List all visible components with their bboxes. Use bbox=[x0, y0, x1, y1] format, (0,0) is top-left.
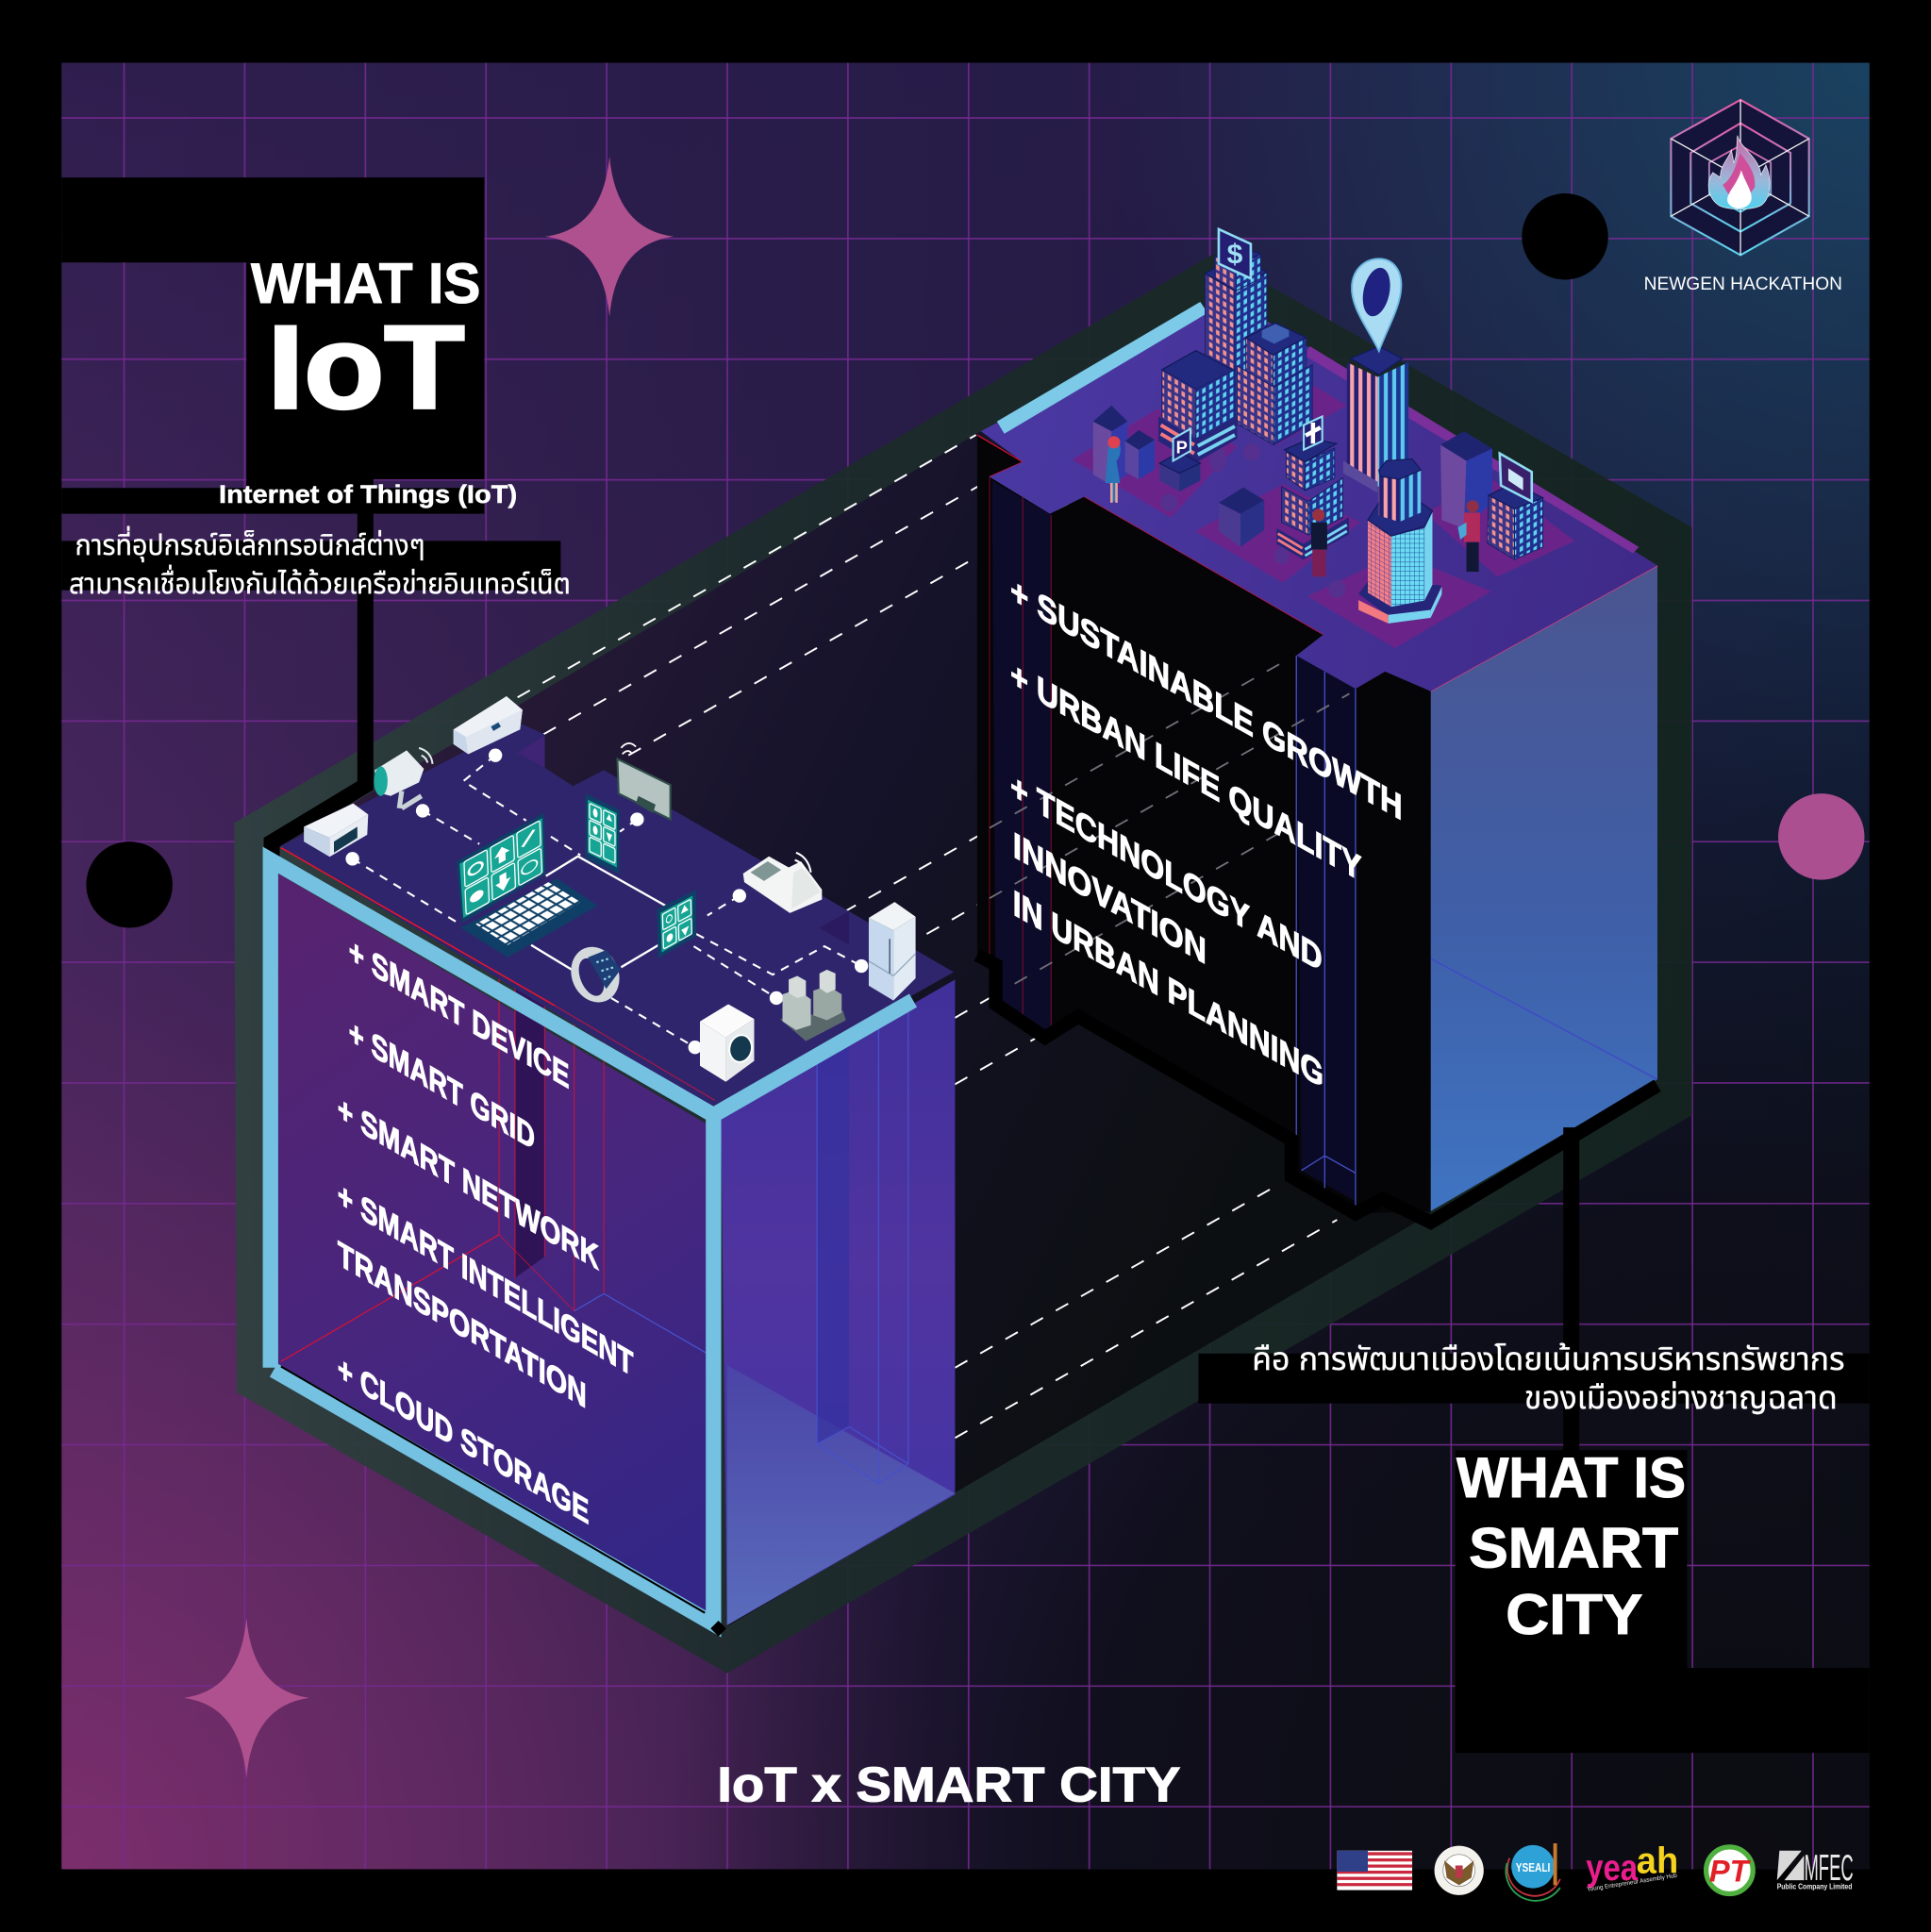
logo: MFEC bbox=[1777, 1848, 1854, 1890]
city box list text: + SUSTAINABLE GROWTH bbox=[1010, 569, 1403, 828]
bottom corner mark bbox=[710, 1621, 726, 1637]
IoT box list text bbox=[338, 930, 633, 1532]
logo: Newgen Hackathon: NEWGEN HACKATHON bbox=[1644, 274, 1842, 294]
inner black line bbox=[281, 1366, 705, 1613]
city box list text bbox=[1010, 569, 1403, 1096]
icon: tablet bbox=[657, 890, 696, 958]
IoT rooftop bbox=[280, 724, 954, 1108]
text block: IoT definition in Thai: การที่อุปกรณ์อิเล็กทรอนิกส์ต่างๆ bbox=[75, 525, 425, 562]
building: parking with sign: P bbox=[1176, 438, 1188, 458]
city box black base outline bbox=[977, 955, 1657, 1223]
building: right mid tower bbox=[1238, 323, 1312, 445]
icon: smartwatch bbox=[563, 940, 627, 1009]
logo: YSEALI: YSEALI bbox=[1516, 1860, 1550, 1874]
city box black facade bbox=[977, 435, 1431, 1214]
text block: IoT definition in Thai: สามารถเชื่อมโยงกันได้ด้วยเครือข่ายอินเทอร์เน็ต bbox=[69, 564, 571, 600]
building: parking with sign bbox=[1159, 429, 1200, 491]
IoT heading block bbox=[61, 177, 560, 857]
building: stacked right block with sign bbox=[1488, 454, 1543, 559]
logo: US flag bbox=[1337, 1851, 1412, 1890]
faint dashes behind facade bbox=[990, 663, 1349, 998]
heading: what is smart city: SMART bbox=[1469, 1516, 1679, 1579]
heading: what is IoT bbox=[251, 252, 480, 433]
IoT box list text: + SMART DEVICE bbox=[349, 930, 570, 1097]
person: man in red bbox=[1457, 500, 1480, 572]
heading: what is smart city: WHAT IS bbox=[1457, 1446, 1686, 1509]
decorative black circle top right bbox=[1522, 193, 1608, 279]
heading: what is smart city bbox=[1457, 1446, 1686, 1646]
logo: US embassy seal bbox=[1435, 1846, 1484, 1895]
icon: four point star bottom bbox=[184, 1618, 309, 1778]
Thai description band bbox=[61, 541, 560, 591]
partner logos bbox=[1337, 1840, 1854, 1901]
icon: dollar sign board bbox=[1219, 229, 1251, 278]
text block: IoT definition in Thai bbox=[69, 525, 571, 600]
logo: YEAH bbox=[1586, 1840, 1678, 1893]
logo: YEAH: Young Entrepreneur Assembly Hub bbox=[1587, 1873, 1678, 1893]
magenta back rim bbox=[1304, 346, 1639, 553]
icon: refrigerator bbox=[869, 902, 916, 1001]
facade translucent columns bbox=[977, 435, 1356, 1205]
heading: what is IoT: WHAT IS bbox=[251, 252, 480, 315]
city box list text: IN URBAN PLANNING bbox=[1013, 882, 1323, 1096]
icon: washing machine bbox=[700, 1004, 755, 1082]
side inner columns bbox=[817, 1004, 908, 1484]
text block: smart city definition in Thai: ของเมืองอย่างชาญฉลาด bbox=[1524, 1380, 1838, 1416]
icon: four point star top bbox=[545, 157, 674, 317]
rooftop magenta city blocks bbox=[1072, 383, 1574, 648]
logo: YEAH: yea bbox=[1586, 1848, 1639, 1889]
building: middle tower with hospital sign bbox=[1276, 416, 1349, 559]
IoT box list text: + SMART NETWORK bbox=[338, 1089, 599, 1278]
logo: PT: PT bbox=[1709, 1853, 1752, 1888]
rooftop notch shadow right bbox=[819, 911, 849, 945]
network nodes bbox=[345, 748, 868, 1054]
title: IoT x Smart City: IoT x SMART CITY bbox=[717, 1758, 1180, 1813]
panel: smart city box bbox=[977, 229, 1657, 1223]
logo: MFEC: Public Company Limited bbox=[1777, 1882, 1852, 1890]
icon: laptop bbox=[457, 813, 598, 958]
light blue rim bbox=[997, 302, 1207, 434]
building: dark right slab bbox=[1440, 431, 1492, 528]
rooftop front red edge bbox=[281, 848, 555, 1006]
smart city heading blocks bbox=[1199, 1127, 1870, 1753]
IoT box list text: + SMART INTELLIGENT bbox=[338, 1174, 633, 1385]
city box list text: + TECHNOLOGY AND bbox=[1010, 765, 1323, 979]
text block: smart city definition in Thai: คือ การพัฒนาเมืองโดยเน้นการบริหารทรัพยากร bbox=[1252, 1341, 1845, 1377]
front floor lines and inner column bbox=[281, 974, 707, 1361]
icon: pickup truck bbox=[743, 853, 822, 913]
icon: air conditioner bbox=[454, 696, 523, 754]
icon: microwave bbox=[304, 804, 368, 857]
icon: dollar sign board: $ bbox=[1227, 240, 1243, 271]
decorative black circle left bbox=[86, 841, 173, 928]
heading: what is smart city: CITY bbox=[1506, 1583, 1642, 1646]
building: striped pin tower bbox=[1343, 346, 1408, 492]
building: left block bbox=[1158, 351, 1238, 463]
city box list text: + URBAN LIFE QUALITY bbox=[1010, 653, 1361, 890]
IoT box side face bbox=[721, 979, 955, 1625]
dashed connectors between IoT box and city box bbox=[518, 435, 1337, 1438]
building: small back towers bbox=[1093, 406, 1155, 486]
decorative pink circle right bbox=[1778, 793, 1864, 880]
building: small mid block bbox=[1219, 488, 1264, 547]
IoT box list text: + CLOUD STORAGE bbox=[338, 1348, 589, 1532]
laptop screen app tiles bbox=[464, 821, 541, 915]
person: woman in blue bbox=[1106, 436, 1121, 503]
IoT box list text: + SMART GRID bbox=[349, 1012, 535, 1158]
building: octagonal front tower bbox=[1358, 459, 1441, 624]
icon: location pin bbox=[1352, 258, 1401, 351]
panel: IoT box bbox=[271, 696, 955, 1637]
heading: what is IoT: IoT bbox=[267, 300, 464, 433]
subheading: internet of things: Internet of Things (IoT) bbox=[219, 480, 517, 508]
icon: speakers bbox=[780, 970, 846, 1041]
dark connecting volume between the two boxes bbox=[280, 431, 1431, 1626]
text block: smart city definition in Thai bbox=[1252, 1341, 1845, 1416]
IoT box list text: TRANSPORTATION bbox=[338, 1234, 587, 1416]
logo: PT bbox=[1706, 1847, 1753, 1894]
logo: YSEALI bbox=[1506, 1843, 1560, 1901]
IoT box side floor bbox=[727, 1365, 955, 1625]
city box floor line bbox=[1431, 958, 1657, 1079]
text: MFEC bbox=[1804, 1848, 1854, 1889]
city box list text: INNOVATION bbox=[1013, 824, 1207, 973]
light blue box frame bbox=[271, 860, 913, 1624]
connector stem from IoT heading to box bbox=[264, 479, 374, 857]
rooftop notch shadow left bbox=[518, 736, 544, 768]
rooftop trees bbox=[1161, 443, 1345, 597]
city rooftop bbox=[981, 299, 1657, 691]
isometric drop shadow hexagon bbox=[234, 254, 1692, 1674]
logo: Newgen Hackathon bbox=[1644, 100, 1842, 294]
logo: YEAH: ah bbox=[1637, 1840, 1678, 1881]
IoT box front face bbox=[276, 873, 707, 1617]
device network lines bbox=[353, 756, 861, 1047]
icon: security camera bbox=[374, 748, 433, 808]
building: tall tower with dollar sign bbox=[1206, 245, 1267, 419]
icon: television bbox=[617, 743, 671, 820]
icon: flame bbox=[1708, 136, 1770, 209]
city box side face bbox=[1431, 566, 1657, 1211]
person: man in black bbox=[1311, 508, 1327, 576]
icon: smartphone bbox=[586, 793, 619, 874]
